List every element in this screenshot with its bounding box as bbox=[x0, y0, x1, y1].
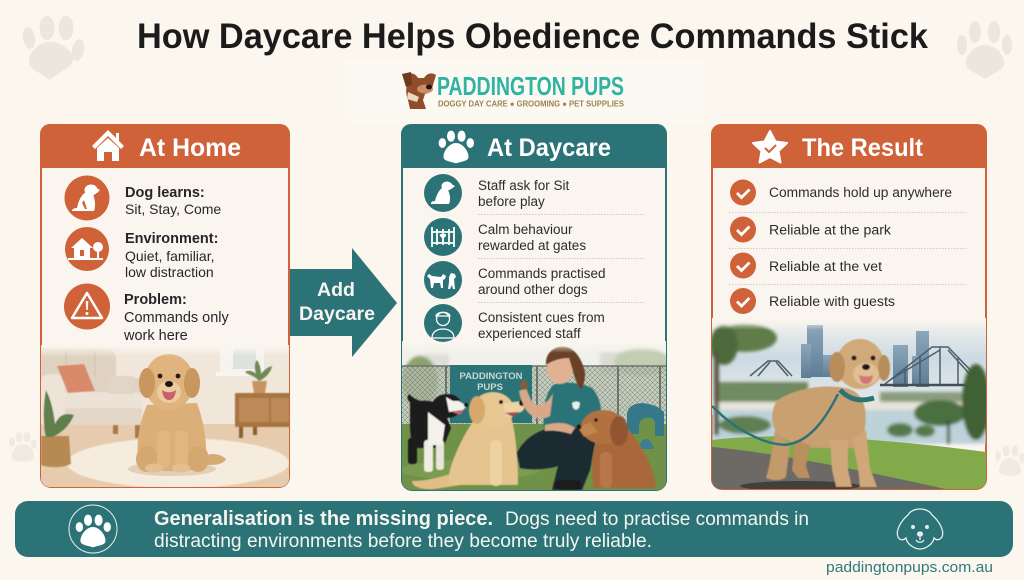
commands practised text: around other dogs bbox=[478, 282, 588, 297]
at daycare header bbox=[401, 124, 667, 168]
website url: paddingtonpups.com.au bbox=[826, 559, 993, 576]
banner text: distracting environments before they become truly reliable. bbox=[154, 531, 652, 552]
item: calm behaviour bbox=[424, 218, 586, 256]
dog: doodle on leash bbox=[766, 339, 890, 487]
banner text bbox=[154, 508, 809, 552]
result item: vet bbox=[730, 252, 882, 278]
skyline bbox=[801, 325, 929, 387]
result heading: The Result bbox=[802, 134, 924, 162]
arrow: add daycare bbox=[290, 248, 397, 357]
arrow label: Daycare bbox=[299, 303, 375, 325]
result item: anywhere bbox=[730, 180, 952, 206]
park text: Reliable at the park bbox=[769, 222, 891, 238]
staff ask text: before play bbox=[478, 194, 545, 209]
at daycare scene bbox=[400, 343, 670, 492]
sign: paddington pups: PADDINGTON bbox=[460, 371, 523, 382]
icon: check bbox=[730, 216, 756, 242]
result item: park bbox=[730, 216, 891, 242]
tunnel bbox=[627, 403, 664, 449]
at daycare heading: At Daycare bbox=[487, 134, 611, 162]
vet text: Reliable at the vet bbox=[769, 259, 882, 274]
guests text: Reliable with guests bbox=[769, 294, 895, 309]
consistent cues text: experienced staff bbox=[478, 326, 581, 341]
banner text: Dogs need to practise commands in bbox=[505, 509, 809, 530]
item: dog learns bbox=[64, 176, 221, 220]
environment text: Quiet, familiar, bbox=[125, 248, 214, 264]
item: consistent cues bbox=[424, 304, 605, 342]
panel: at daycare bbox=[400, 124, 670, 492]
decorative paw: top left bbox=[21, 16, 86, 80]
arrow label: Add bbox=[317, 279, 355, 301]
icon: gate bbox=[424, 218, 462, 256]
icon: staff person bbox=[424, 304, 462, 342]
decorative paw: lower left bbox=[9, 432, 37, 462]
icon: star with check bbox=[753, 131, 787, 162]
item: staff ask for sit bbox=[424, 174, 570, 212]
title: How Daycare Helps Obedience Commands Stick bbox=[137, 17, 929, 56]
icon: house and tree bbox=[65, 227, 109, 271]
handler bbox=[517, 347, 601, 490]
decorative paw: lower right bbox=[995, 446, 1024, 476]
at home heading: At Home bbox=[139, 134, 241, 162]
icon: two dogs bbox=[424, 261, 462, 299]
icon: sitting dog bbox=[64, 176, 110, 220]
at home scene bbox=[41, 347, 291, 489]
result header bbox=[711, 124, 987, 168]
item: environment bbox=[65, 227, 218, 280]
environment text: Environment: bbox=[125, 231, 218, 247]
bridges bbox=[740, 347, 978, 386]
banner: generalisation bbox=[15, 501, 1013, 557]
problem text: work here bbox=[123, 328, 188, 344]
panel: the result bbox=[710, 124, 990, 491]
consistent cues text: Consistent cues from bbox=[478, 310, 605, 325]
banner icon: doodle face bbox=[897, 509, 943, 549]
calm behaviour text: Calm behaviour bbox=[478, 222, 573, 237]
logo: tagline: DOGGY DAY CARE ● GROOMING ● PET SUPPLIES bbox=[438, 100, 625, 108]
dog learns text: Sit, Stay, Come bbox=[125, 201, 221, 217]
dog: brown doodle bbox=[577, 410, 656, 488]
anywhere text: Commands hold up anywhere bbox=[769, 185, 952, 200]
icon: house bbox=[92, 130, 124, 161]
banner text: Generalisation is the missing piece. bbox=[154, 508, 493, 530]
decorative paw: top right bbox=[957, 21, 1012, 79]
problem text: Commands only bbox=[124, 310, 230, 326]
logo bbox=[345, 60, 705, 122]
dog: border collie bbox=[408, 394, 468, 472]
icon: paw bbox=[439, 131, 474, 164]
panel: at home bbox=[40, 124, 291, 489]
banner icon: paw bbox=[69, 505, 117, 553]
problem text: Problem: bbox=[124, 292, 187, 308]
icon: check bbox=[730, 252, 756, 278]
environment text: low distraction bbox=[125, 264, 214, 280]
sign: paddington pups: PUPS bbox=[477, 382, 503, 393]
leash and collar bbox=[712, 390, 874, 445]
icon: sitting dog bbox=[424, 174, 462, 212]
staff ask text: Staff ask for Sit bbox=[478, 178, 570, 193]
icon: check bbox=[730, 288, 756, 314]
dog: seated doodle bbox=[128, 354, 226, 476]
dog: golden retriever bbox=[412, 392, 525, 489]
sign: paddington pups bbox=[450, 365, 532, 423]
icon: check bbox=[730, 180, 756, 206]
result item: guests bbox=[730, 288, 895, 314]
dog learns text: Dog learns: bbox=[125, 185, 205, 201]
result scene bbox=[710, 320, 990, 491]
item: problem bbox=[64, 284, 230, 344]
item: commands practised bbox=[424, 261, 606, 299]
logo: wordmark: PADDINGTON PUPS bbox=[437, 71, 624, 101]
commands practised text: Commands practised bbox=[478, 266, 606, 281]
logo: dog mascot bbox=[402, 72, 436, 109]
icon: warning bbox=[64, 284, 110, 330]
calm behaviour text: rewarded at gates bbox=[478, 238, 586, 253]
at home header bbox=[40, 124, 290, 168]
